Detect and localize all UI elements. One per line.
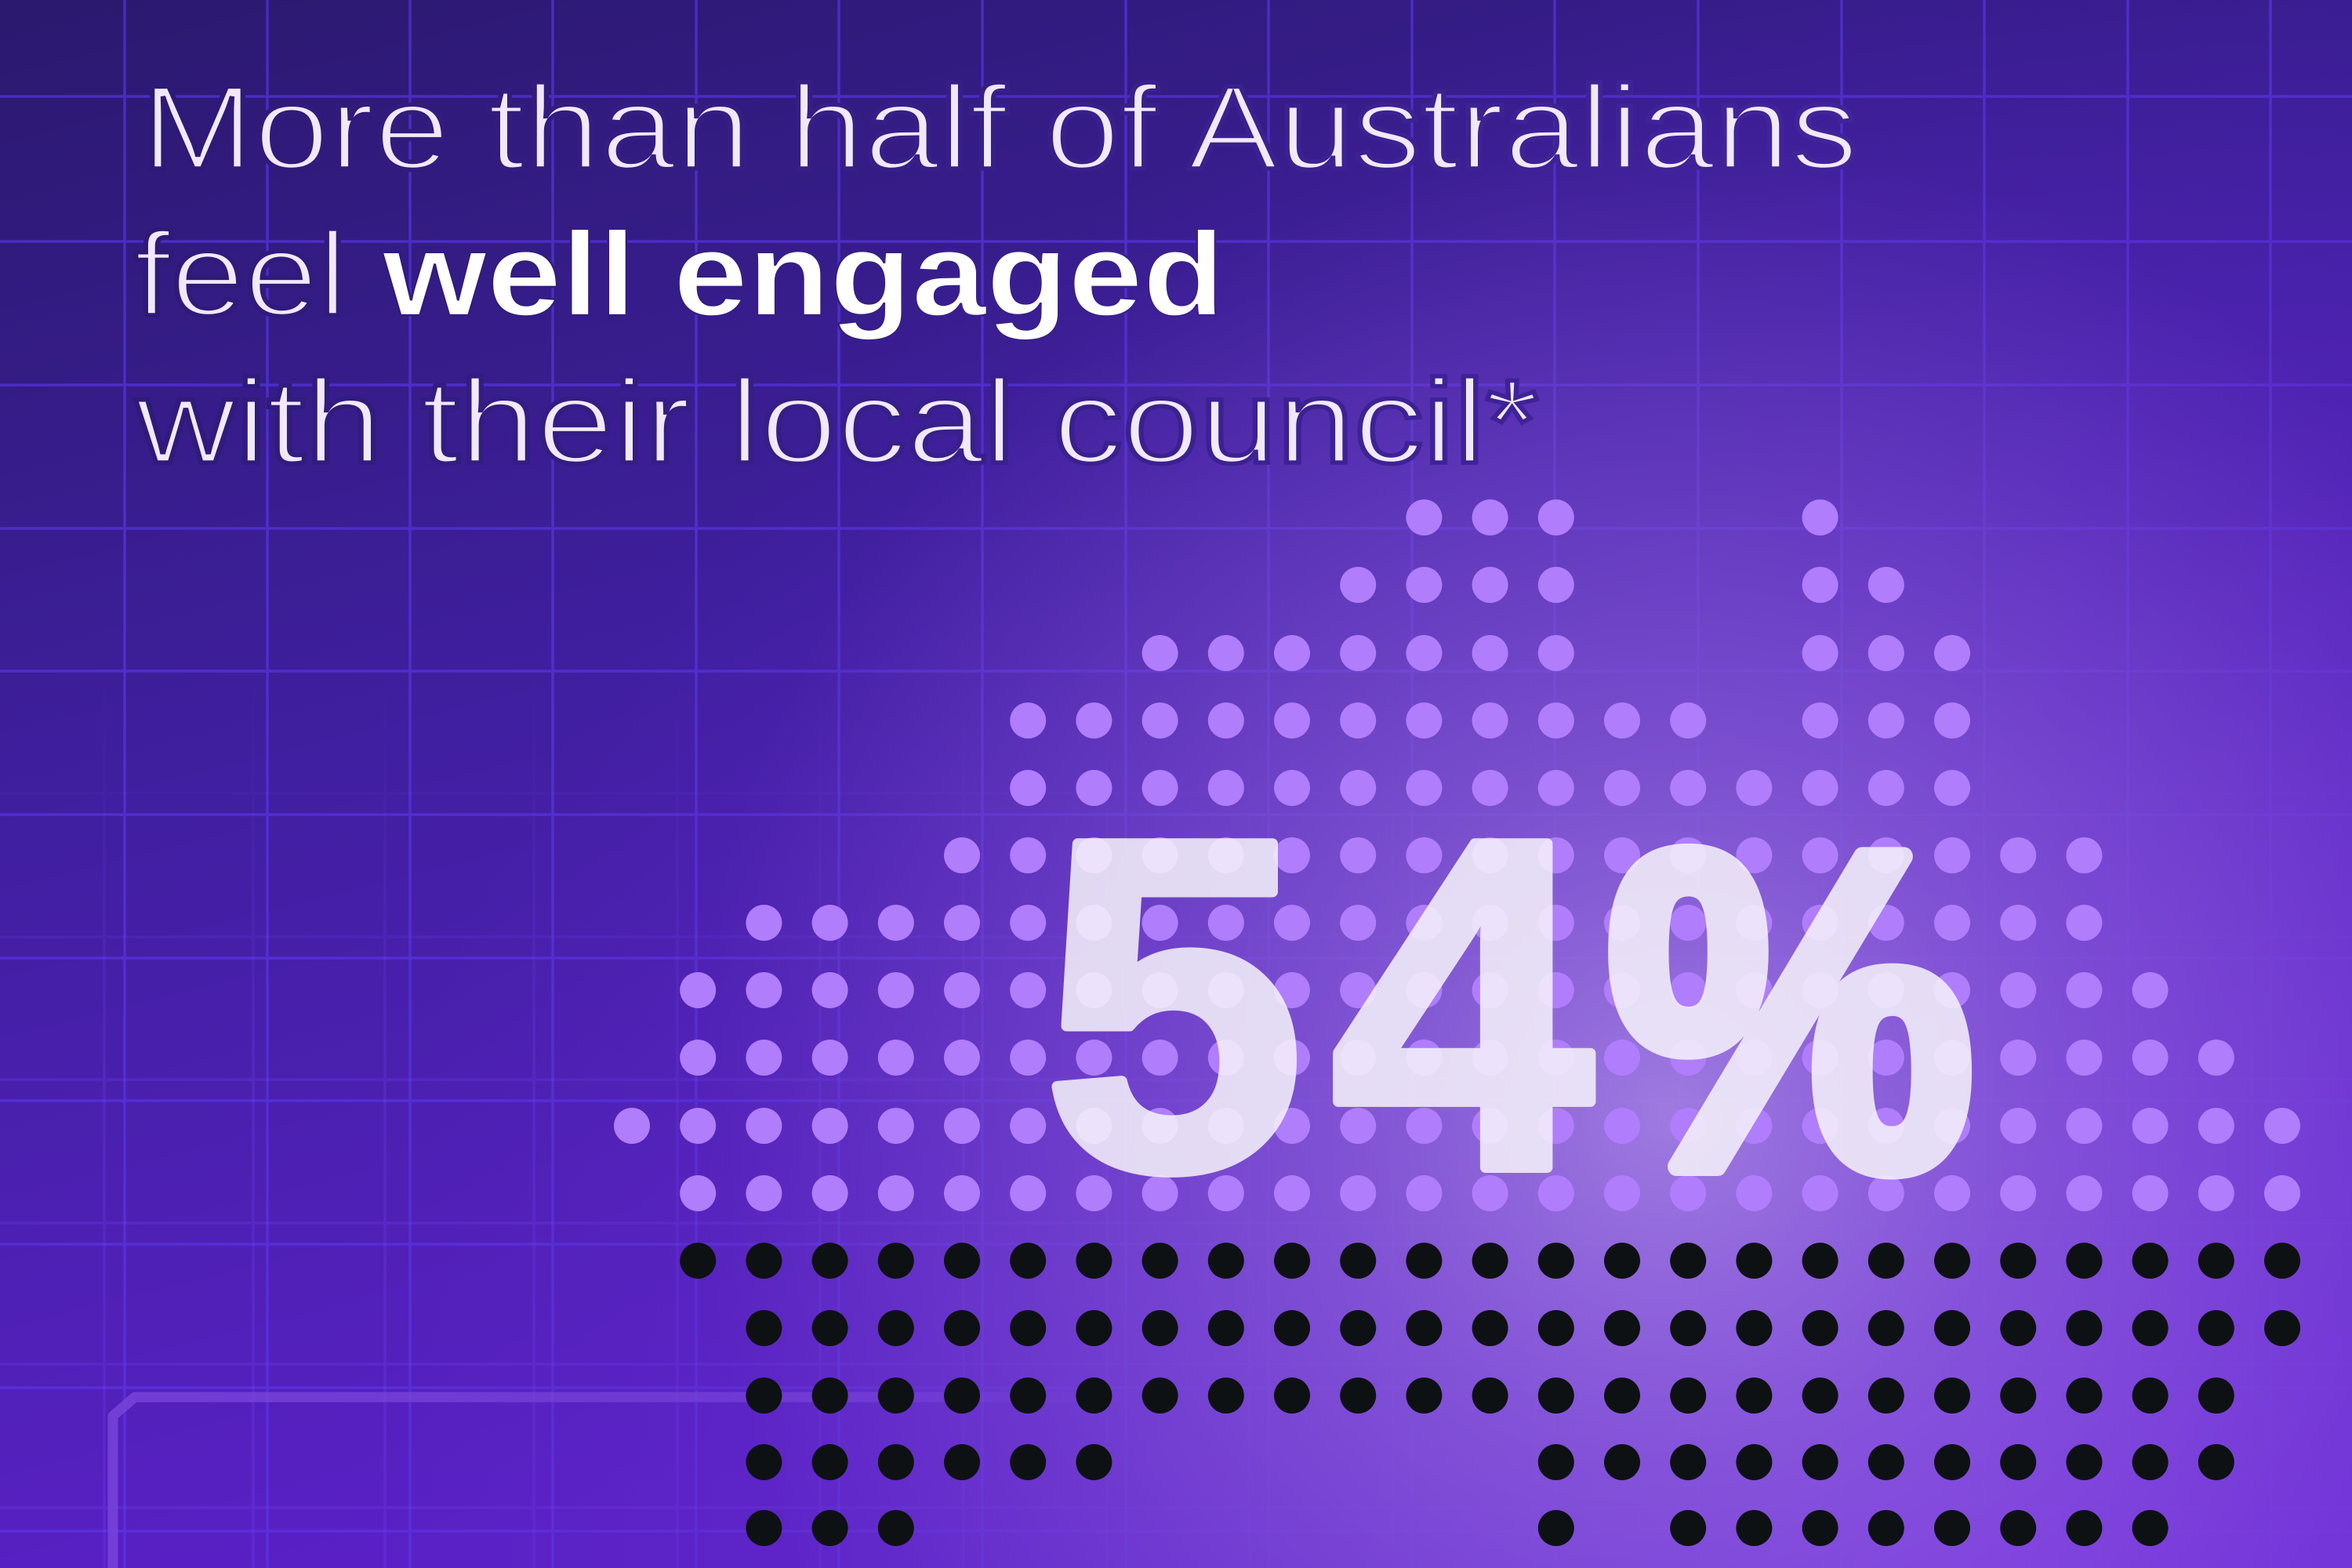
- dots: remaining 46 percent (black): [698, 1261, 2283, 1528]
- dots: engaged 54 percent (light): [632, 517, 2283, 1193]
- title: [134, 61, 1858, 488]
- dot map of Australia: [632, 517, 2283, 1528]
- big statistic: 54%: %: [1606, 758, 1974, 1262]
- big statistic: 54%: 54: [1043, 742, 1596, 1268]
- title line 3: with their local council*: [135, 355, 1539, 488]
- title line 1: More than half of Australians: [141, 61, 1858, 194]
- title line 2: well engaged (bold): well engaged: [382, 208, 1225, 341]
- big statistic: 54%: [1043, 742, 1974, 1268]
- panel outline: lower-left card edge: [113, 1397, 1176, 1568]
- title line 2: feel: feel: [134, 208, 347, 341]
